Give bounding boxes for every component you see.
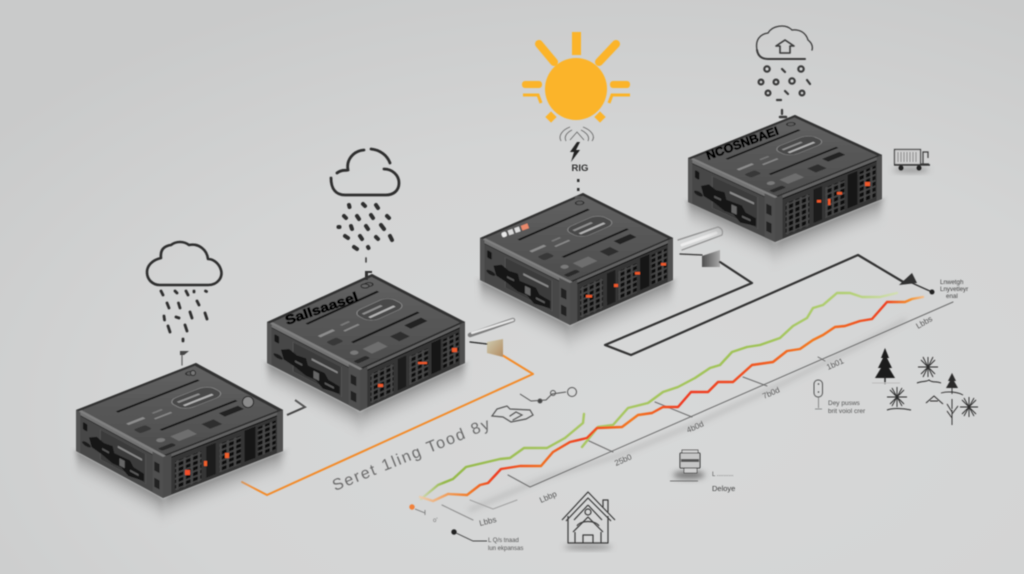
icon: large pine tree — [872, 348, 900, 384]
connector: device 1 bracket — [287, 400, 305, 415]
chart shadow — [470, 320, 905, 510]
icon: house — [562, 492, 615, 550]
axis labels: 4b0d — [685, 419, 705, 435]
icon: server with legend — [670, 450, 735, 493]
icon: sun — [522, 32, 630, 123]
icon: rain cloud 2 — [331, 149, 399, 288]
green series — [421, 293, 897, 499]
icon: server with legend: L .......... — [712, 472, 734, 478]
icon: heat waves — [560, 127, 593, 141]
axis labels — [478, 314, 934, 528]
chart: time series — [420, 293, 953, 520]
icon: key line — [520, 388, 576, 403]
axis labels: Lbbs — [914, 314, 934, 331]
flow line: orange connector — [242, 339, 533, 495]
red series — [420, 297, 923, 501]
device 2 — [267, 274, 465, 440]
legend: note with leader: L Q/s tnaad — [488, 538, 519, 544]
axis labels: 1b01 — [825, 356, 846, 372]
connector rod: device 3 — [678, 227, 722, 250]
rotated heading: Seret 1ling Tood 8y — [330, 416, 492, 495]
icon: cloud with house — [757, 26, 812, 117]
axis labels: 25b0 — [613, 452, 634, 468]
axis labels: Lbbs — [478, 515, 497, 528]
icon: small device outline — [492, 406, 533, 422]
icon: pin with note — [814, 380, 866, 415]
device 3 top label — [501, 223, 529, 238]
icon: server with legend: Deloye — [712, 484, 735, 493]
dotted link: sun to device 3 — [575, 179, 581, 199]
axis labels: Lbbp — [538, 489, 559, 505]
legend: start marker — [409, 504, 437, 524]
icon: lightning bolt — [570, 142, 580, 162]
callout: top right note: Lnwetgh — [940, 279, 964, 286]
legend: note with leader — [451, 529, 523, 552]
callout: top right note — [940, 279, 968, 300]
connector rod: device 2 — [470, 320, 513, 335]
icons: snowflakes and trees — [887, 357, 978, 425]
callout: top right note: enal — [946, 293, 958, 300]
legend: note with leader: lun ekpansas — [488, 546, 523, 552]
chart axis — [442, 302, 953, 520]
axis labels: 7b0d — [761, 385, 781, 401]
icon: rain cloud 1 — [147, 242, 221, 365]
device 2 top label: Sallsaasel — [283, 289, 360, 328]
flow line: black connector with arrowhead — [605, 250, 934, 355]
legend: start marker: o' — [433, 518, 437, 524]
device 4 — [688, 115, 882, 271]
device 1 — [76, 363, 283, 527]
icon: truck — [893, 150, 930, 172]
icon: pin with note: brit voiol crer — [828, 408, 866, 415]
callout: top right note: Lnyvetleyr — [940, 286, 968, 293]
label: RIG: RIG — [572, 163, 588, 174]
device 4 top label: NCOSNBAEI — [704, 124, 780, 163]
icon: pin with note: Dey pusws — [828, 400, 861, 407]
device 3 — [480, 193, 673, 354]
